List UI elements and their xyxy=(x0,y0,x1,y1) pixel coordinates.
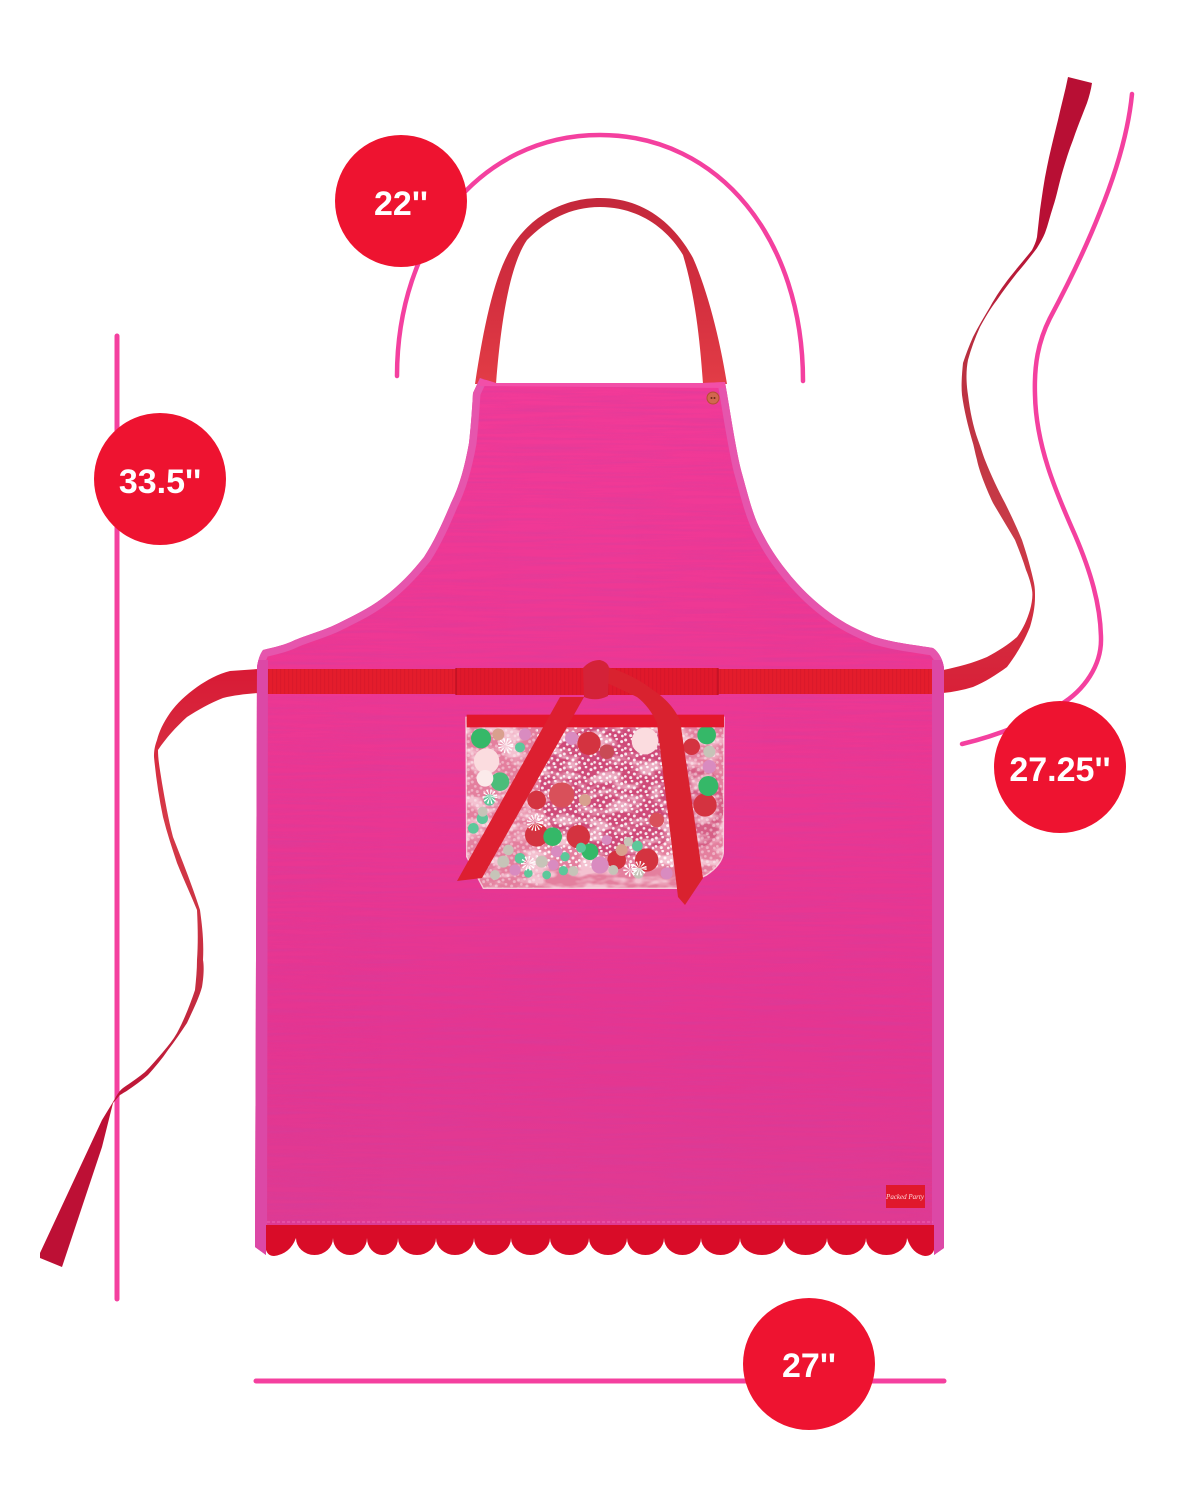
right waist tie xyxy=(943,77,1092,693)
confetti pocket xyxy=(466,715,726,891)
waist belt xyxy=(250,669,950,694)
neck binding xyxy=(480,383,725,385)
badge: 33.5 inches: 33.5'' xyxy=(119,463,201,501)
badge: 22 inches: 22'' xyxy=(374,185,428,223)
pocket background xyxy=(466,717,724,888)
measure line: width 27 inches xyxy=(256,1378,944,1384)
apron body xyxy=(250,370,950,1260)
neck strap xyxy=(475,198,727,384)
bib binding xyxy=(257,378,944,668)
snowflake sequins xyxy=(486,742,643,873)
bow knot xyxy=(583,660,609,699)
left waist tie xyxy=(40,669,258,1267)
measure arc: neck strap 22 inches xyxy=(397,135,803,381)
right ribbon tail xyxy=(607,667,703,905)
left ribbon tail xyxy=(457,697,584,881)
measure line: height 33.5 inches xyxy=(114,336,120,1299)
pocket top band xyxy=(467,715,724,727)
brand label xyxy=(885,1185,925,1208)
badge: 22 inches xyxy=(335,135,467,267)
bow loop xyxy=(456,668,718,695)
pale sequins xyxy=(474,728,658,787)
scalloped hem xyxy=(266,1225,934,1256)
badge: 27 inches: 27'' xyxy=(782,1347,836,1385)
silver sequins xyxy=(478,746,715,880)
button xyxy=(707,392,719,404)
badge: 27.25 inches xyxy=(994,701,1126,833)
red sequins xyxy=(525,732,717,872)
lilac sequins xyxy=(509,728,716,879)
mint sequins xyxy=(468,742,643,879)
badge: 27.25 inches: 27.25'' xyxy=(1009,751,1111,789)
measure squiggle: tie length 27.25 inches xyxy=(962,94,1132,744)
green glitter sequins xyxy=(471,726,718,860)
pink shimmer xyxy=(466,717,726,891)
brand label: Packed Party xyxy=(885,1193,925,1201)
tan sequins xyxy=(492,728,628,856)
badge: 33.5 inches xyxy=(94,413,226,545)
side binding xyxy=(255,660,944,1260)
badge: 27 inches xyxy=(743,1298,875,1430)
stitching xyxy=(267,1222,933,1223)
